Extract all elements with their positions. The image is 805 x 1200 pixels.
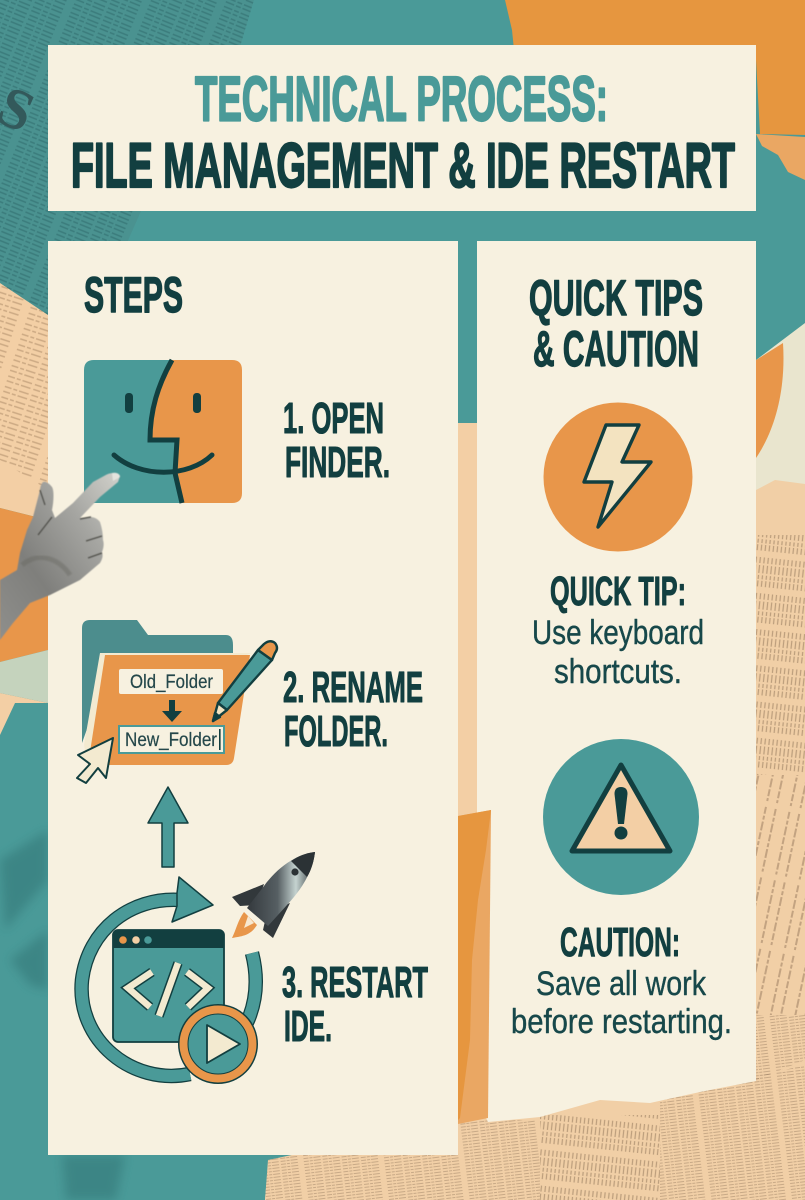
icon: rocket [232, 852, 315, 938]
quick tip text [532, 568, 704, 691]
step 1 label: FINDER. [285, 438, 390, 487]
header panel [48, 45, 756, 211]
left newspaper scrap [0, 283, 48, 520]
right orange circle [756, 343, 783, 458]
step 3 label: 3. RESTART [282, 958, 428, 1007]
caution text: Save all work [536, 965, 707, 1003]
icon: lightning bolt [544, 402, 692, 552]
step 2 label: 2. RENAME [283, 663, 423, 712]
old folder label: Old_Folder [130, 672, 214, 693]
play button [178, 1004, 258, 1084]
code window [113, 930, 224, 1042]
quick tip text: shortcuts. [554, 653, 682, 691]
step 3 label: IDE. [284, 1002, 332, 1051]
step 2 label [283, 663, 423, 756]
arrow: up [148, 787, 188, 867]
bottom newspaper scrap [265, 1060, 805, 1200]
caution text: CAUTION: [560, 919, 680, 965]
icon: mouse cursor [77, 738, 113, 783]
heading: steps: STEPS [84, 267, 183, 323]
middle strip [458, 241, 477, 813]
caution text [511, 919, 732, 1041]
orange torn strip [458, 810, 491, 1124]
quick tip text: Use keyboard [532, 614, 704, 652]
new folder input: New_Folder [125, 730, 218, 751]
bottom-left crumpled teal shading [0, 830, 125, 1200]
heading: quick tips and caution: & CAUTION [533, 321, 699, 377]
right cream patch [756, 323, 805, 490]
heading: quick tips and caution [529, 270, 703, 377]
torn lighter orange paper [756, 134, 805, 180]
right newspaper column [265, 423, 805, 1200]
step 2 label: FOLDER. [284, 707, 388, 756]
top-left newspaper scrap [0, 0, 254, 320]
panel: steps [48, 241, 458, 1155]
hand pointing at finder icon [0, 473, 120, 640]
icon: folder rename [77, 620, 277, 783]
small down arrow [162, 700, 182, 722]
top-right orange paper [505, 0, 805, 135]
left orange, green and peach shapes [0, 508, 48, 735]
quick tip text: QUICK TIP: [550, 568, 686, 614]
caution text: before restarting. [511, 1003, 732, 1041]
step 1 label [283, 394, 390, 487]
step 1 label: 1. OPEN [283, 394, 384, 443]
step 3 label [282, 958, 428, 1051]
panel: quick tips and caution [458, 241, 756, 1124]
restart ring [82, 877, 256, 1076]
icon: restart IDE [82, 852, 315, 1084]
icon: finder [84, 360, 242, 503]
icon: warning triangle [543, 739, 699, 895]
icon: pencil [213, 641, 277, 721]
